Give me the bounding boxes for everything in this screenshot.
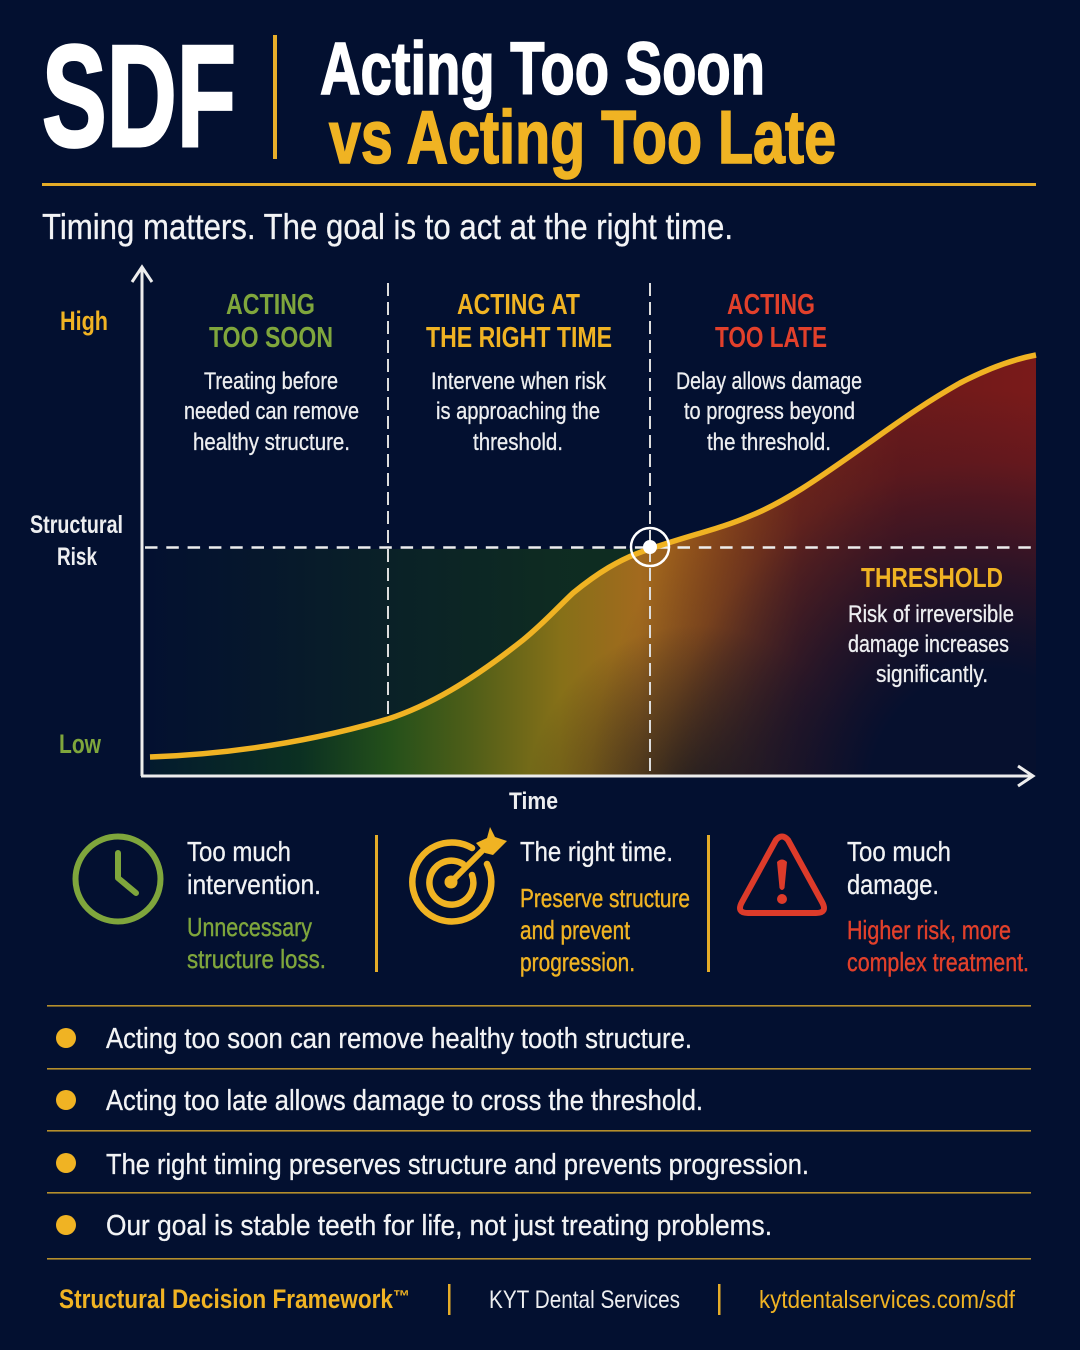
- column: acting too soon: [184, 289, 359, 456]
- phase divider left: [387, 283, 389, 718]
- column: acting at the right time: [426, 289, 612, 456]
- y axis label structural risk: Risk: [57, 543, 97, 571]
- title line 2: vs Acting Too Late: [329, 95, 836, 179]
- subtitle: Timing matters. The goal is to act at the right time.: [42, 206, 733, 247]
- description: healthy structure.: [193, 429, 350, 456]
- right time consequence: [520, 883, 690, 977]
- too soon consequence: Unnecessary: [187, 912, 312, 942]
- heading: TOO LATE: [715, 322, 827, 354]
- threshold description: significantly.: [876, 661, 988, 688]
- outcome panel: too soon: [76, 836, 326, 974]
- description: [676, 368, 862, 456]
- x axis: [141, 766, 1033, 786]
- threshold heading: THRESHOLD: [861, 562, 1003, 593]
- too late headline: Too much: [847, 836, 951, 867]
- heading: ACTING AT: [457, 289, 580, 321]
- threshold dashed line: [145, 546, 1036, 549]
- too soon consequence: structure loss.: [187, 944, 326, 974]
- threshold description: Risk of irreversible: [848, 601, 1014, 628]
- too soon headline: [187, 836, 321, 900]
- framework name: ™: [393, 1287, 410, 1306]
- description: [431, 368, 607, 456]
- footer: [59, 1284, 1015, 1315]
- too soon consequence: [187, 912, 326, 974]
- right time consequence: Preserve structure: [520, 883, 690, 913]
- threshold description: [848, 601, 1014, 688]
- y axis label structural risk: Structural: [30, 511, 123, 539]
- heading: [209, 289, 333, 354]
- outcome panel: too late: [740, 836, 1029, 977]
- right time headline: The right time.: [520, 836, 673, 867]
- y axis label low: Low: [59, 729, 102, 759]
- heading: THE RIGHT TIME: [426, 322, 612, 354]
- icon: clock: [76, 836, 160, 922]
- chart: structural risk over time: [30, 264, 1036, 809]
- x axis label: Time: [509, 788, 558, 815]
- risk curve: [150, 355, 1036, 757]
- column: acting too late: [676, 289, 862, 456]
- point 2: Acting too late allows damage to cross the threshold.: [106, 1085, 703, 1117]
- description: threshold.: [473, 429, 563, 456]
- heading: TOO SOON: [209, 322, 333, 354]
- y axis: [132, 267, 152, 776]
- icon: target with arrow: [412, 827, 507, 921]
- heading: [715, 289, 827, 354]
- heading: ACTING: [727, 289, 815, 321]
- chart colour fill: [150, 358, 1036, 774]
- key points list: [47, 1005, 1031, 1260]
- description: the threshold.: [707, 429, 831, 456]
- too late headline: [847, 836, 951, 900]
- title block: [42, 15, 836, 179]
- SDF logotype: SDF: [42, 15, 236, 177]
- too soon headline: Too much: [187, 836, 291, 867]
- website: kytdentalservices.com/sdf: [759, 1286, 1015, 1314]
- point 1: Acting too soon can remove healthy tooth structure.: [106, 1023, 692, 1055]
- icon: warning triangle: [740, 836, 824, 913]
- point 4: Our goal is stable teeth for life, not just treating problems.: [106, 1210, 772, 1242]
- title divider: [273, 35, 277, 159]
- description: needed can remove: [184, 398, 359, 425]
- outcome panel: right time: [412, 827, 690, 977]
- too soon headline: intervention.: [187, 869, 321, 900]
- description: Intervene when risk: [431, 368, 607, 395]
- company name: KYT Dental Services: [489, 1286, 680, 1314]
- too late consequence: Higher risk, more: [847, 915, 1011, 945]
- y axis label high: High: [60, 306, 108, 336]
- point 3: The right timing preserves structure and prevents progression.: [106, 1149, 809, 1181]
- description: [184, 368, 359, 456]
- heading: [426, 289, 612, 354]
- too late headline: damage.: [847, 869, 939, 900]
- description: Delay allows damage: [676, 368, 862, 395]
- threshold note: [848, 562, 1014, 688]
- y axis label structural risk: [30, 511, 123, 571]
- heading: ACTING: [226, 289, 315, 321]
- right time consequence: and prevent: [520, 915, 631, 945]
- description: to progress beyond: [684, 398, 855, 425]
- threshold description: damage increases: [848, 631, 1009, 658]
- right time consequence: progression.: [520, 947, 635, 977]
- framework name: Structural Decision Framework: [59, 1284, 394, 1314]
- too late consequence: complex treatment.: [847, 947, 1029, 977]
- too late consequence: [847, 915, 1029, 977]
- title line 1: Acting Too Soon: [320, 27, 765, 110]
- description: Treating before: [204, 368, 338, 395]
- description: is approaching the: [436, 398, 600, 425]
- threshold marker: [631, 528, 669, 566]
- phase divider right: [649, 283, 651, 776]
